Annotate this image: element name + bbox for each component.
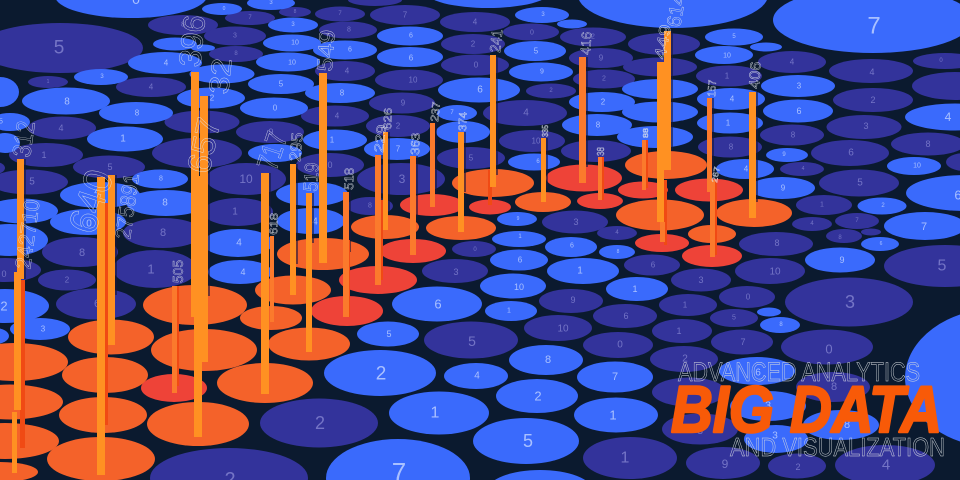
- blue data cells with digits: 5: [279, 80, 284, 88]
- indigo data cells with digits: 9: [599, 54, 604, 62]
- blue data cells with digits: 6: [409, 32, 413, 40]
- indigo data cells with digits: 5: [468, 333, 476, 349]
- blue data cells with digits: 7: [396, 144, 401, 154]
- blue data cells with digits: 6: [518, 256, 523, 264]
- indigo data cells with digits: 2: [396, 122, 401, 130]
- indigo data cells with digits: 5: [107, 162, 113, 172]
- indigo data cells with digits: 8: [838, 235, 842, 241]
- shorter deep orange value bars: [172, 57, 715, 393]
- indigo data cells with digits: 4: [790, 58, 795, 66]
- rotated value labels above bars: 237: [429, 101, 443, 122]
- rotated value labels above bars: 363: [408, 132, 423, 155]
- indigo data cells with digits: 2: [602, 76, 606, 82]
- indigo data cells with digits: 5: [469, 154, 474, 162]
- blue data cells with digits: 6: [348, 46, 352, 54]
- blue data cells with digits: 8: [135, 108, 140, 118]
- blue data cells with digits: 2: [534, 388, 542, 404]
- indigo data cells with digits: 6: [623, 311, 629, 321]
- indigo data cells with digits: 3: [698, 275, 704, 285]
- indigo data cells with digits: 2: [315, 413, 325, 433]
- blue data cells with digits: 3: [41, 324, 46, 334]
- indigo data cells with digits: 4: [58, 123, 64, 133]
- blue data cells with digits: 9: [781, 184, 786, 192]
- rotated value labels above bars: 312: [6, 119, 41, 159]
- indigo data cells with digits: 8: [697, 425, 703, 437]
- rotated value labels above bars: 242710: [10, 198, 45, 271]
- indigo data cells with digits: 4: [882, 456, 890, 474]
- indigo data cells with digits: 0: [473, 247, 477, 253]
- rotated value labels above bars: 38: [596, 147, 607, 156]
- indigo data cells with digits: 2: [471, 40, 476, 48]
- blue data cells with digits: 2: [881, 203, 885, 209]
- rotated value labels above bars: 416: [577, 31, 595, 55]
- rotated value labels above bars: 549: [312, 29, 340, 72]
- blue data cells with digits: 10: [291, 40, 299, 46]
- indigo data cells with digits: 8: [347, 26, 351, 34]
- blue data cells with digits: 1: [507, 308, 511, 314]
- rotated value labels above bars: 157: [706, 79, 719, 97]
- rotated value labels above bars: 406: [746, 61, 765, 89]
- blue data cells with digits: 5: [386, 329, 392, 339]
- indigo data cells with digits: 6: [848, 148, 854, 158]
- indigo data cells with digits: 8: [791, 130, 796, 140]
- indigo data cells with digits: 6: [94, 298, 100, 310]
- blue data cells with digits: 8: [779, 322, 783, 328]
- indigo data cells with digits: 2: [870, 95, 876, 105]
- blue data cells with digits: 6: [477, 84, 483, 96]
- blue data cells with digits: 7: [921, 221, 927, 233]
- indigo data cells with digits: 7: [740, 337, 746, 347]
- indigo data cells with digits: 1: [147, 262, 155, 276]
- indigo data cells with digits: 0: [474, 60, 479, 70]
- indigo data cells with digits: 3: [863, 121, 869, 131]
- rotated value labels above bars: 626: [382, 108, 395, 130]
- indigo data cells with digits: 4: [523, 108, 529, 118]
- rotated value labels above bars: 229: [371, 124, 389, 153]
- indigo data cells with digits: 10: [769, 266, 781, 278]
- blue data cells with digits: 6: [570, 242, 574, 250]
- rotated value labels above bars: 335: [541, 125, 550, 137]
- blue data cells with digits: 2: [210, 94, 215, 102]
- indigo data cells with digits: 7: [199, 117, 205, 127]
- blue data cells with digits: 1: [431, 404, 440, 422]
- blue data cells with digits: 1: [120, 134, 126, 144]
- rotated value labels above bars: 518: [341, 168, 357, 190]
- indigo data cells with digits: 1: [820, 202, 824, 208]
- blue data cells with digits: 3: [772, 430, 778, 442]
- rotated value labels above bars: 275891: [110, 172, 144, 241]
- rotated value labels above bars: 295: [287, 132, 307, 162]
- blue data cells with digits: 6: [434, 296, 442, 312]
- blue data cells with digits: 3: [797, 82, 802, 90]
- indigo data cells with digits: 1: [683, 300, 688, 310]
- blue data cells with digits: 8: [617, 249, 620, 255]
- rotated value labels above bars: 519: [300, 162, 324, 192]
- indigo data cells with digits: 8: [774, 238, 780, 248]
- blue data cells with digits: 3: [541, 12, 545, 18]
- blue data cells with digits: 3: [100, 74, 104, 80]
- indigo data cells with digits: 8: [831, 381, 837, 393]
- blue data cells with digits: 2: [376, 364, 386, 384]
- indigo data cells with digits: 7: [403, 10, 408, 20]
- indigo data cells with digits: 1: [41, 150, 47, 160]
- indigo data cells with digits: 1: [621, 450, 630, 466]
- indigo data cells with digits: 9: [401, 98, 406, 108]
- blue data cells with digits: 10: [514, 282, 524, 292]
- blue data cells with digits: 6: [755, 368, 761, 378]
- indigo data cells with digits: 6: [651, 260, 656, 270]
- blue data cells with digits: 8: [545, 354, 551, 366]
- blue data cells with digits: 8: [340, 88, 345, 98]
- indigo data cells with digits: 3: [845, 292, 855, 312]
- indigo data cells with digits: 3: [233, 32, 237, 40]
- blue data cells with digits: 10: [913, 162, 921, 170]
- indigo data cells with digits: 7: [194, 147, 200, 159]
- blue data cells with digits: 10: [288, 60, 296, 66]
- indigo data cells with digits: 3: [573, 217, 579, 227]
- blue data cells with digits: 4: [240, 267, 246, 277]
- rotated value labels above bars: 657: [180, 114, 227, 176]
- rotated value labels above bars: 449: [652, 23, 675, 61]
- orange data cells: [0, 151, 792, 480]
- indigo data cells with digits: 7: [338, 11, 342, 17]
- indigo data cells with digits: 8: [729, 142, 734, 152]
- red bar side stripes: [20, 140, 717, 448]
- indigo data cells with digits: 10: [532, 136, 541, 146]
- indigo data cells with digits: 0: [327, 160, 333, 170]
- indigo data cells with digits: 9: [268, 127, 274, 137]
- indigo data cells with digits: 2: [549, 88, 553, 94]
- indigo data cells with digits: 8: [294, 9, 297, 15]
- indigo data cells with digits: 0: [617, 340, 623, 350]
- blue data cells with digits: 3: [765, 400, 771, 412]
- blue data cells with digits: 3: [291, 22, 295, 28]
- indigo data cells with digits: 0: [1, 269, 7, 279]
- blue data cells with digits: 1: [518, 234, 522, 240]
- blue data cells with digits: 0: [86, 218, 92, 230]
- indigo data cells with digits: 2: [591, 34, 595, 40]
- indigo data cells with digits: 1: [676, 326, 682, 336]
- indigo data cells with digits: 0: [530, 30, 534, 36]
- indigo data cells with digits: 4: [869, 67, 875, 77]
- blue data cells with digits: 5: [534, 46, 539, 56]
- blue data cells with digits: 0: [273, 104, 278, 112]
- indigo data cells with digits: 10: [409, 76, 418, 84]
- blue data cells with digits: 9: [517, 216, 520, 222]
- blue data cells with digits: 4: [945, 110, 952, 124]
- blue data cells with digits: 1: [632, 284, 638, 294]
- indigo data cells with digits: 1: [725, 72, 730, 80]
- indigo data cells with digits: 4: [335, 112, 340, 120]
- rotated value labels above bars: 267: [710, 165, 722, 183]
- blue data cells with digits: 4: [94, 186, 100, 198]
- indigo data cells with digits: 2: [682, 354, 688, 364]
- bar shadows: [24, 31, 758, 296]
- blue data cells with digits: 7: [450, 110, 454, 116]
- blue data cells with digits: 5: [523, 431, 533, 451]
- blue data cells with digits: 8: [596, 120, 601, 130]
- blue data cells with digits: 1: [609, 408, 617, 422]
- indigo data cells with digits: 8: [79, 247, 85, 259]
- blue data cells with digits: 9: [839, 255, 845, 265]
- blue data cells with digits: 1: [577, 266, 583, 276]
- indigo data cells with digits: 2: [65, 276, 70, 284]
- indigo data cells with digits: 8: [181, 22, 185, 28]
- indigo data cells with digits: 10: [557, 324, 569, 334]
- rotated value labels above bars: 374: [457, 112, 470, 131]
- rotated value labels above bars: [6, 0, 765, 283]
- blue data cells with digits: 8: [844, 419, 850, 431]
- rotated value labels above bars: 505: [170, 260, 187, 283]
- indigo data cells with digits: 0: [939, 58, 943, 64]
- rotated value labels above bars: 32: [203, 57, 238, 96]
- blue data cells with digits: 10: [723, 52, 731, 60]
- blue data cells with digits: 4: [730, 94, 735, 104]
- blue data cells with digits: 7: [612, 371, 618, 383]
- blue data cells with digits: 0: [223, 6, 226, 12]
- blue data cells with digits: 4: [164, 58, 169, 68]
- blue data cells with digits: 1: [726, 118, 731, 128]
- indigo data cells with digits: 8: [234, 51, 238, 57]
- indigo data cells with digits: 4: [149, 82, 154, 92]
- indigo data cells with digits: 4: [473, 18, 478, 26]
- indigo data cells with digits: 5: [857, 178, 863, 188]
- blue data cells with digits: 6: [796, 106, 802, 116]
- indigo data cells with digits: 0: [746, 292, 751, 302]
- blue data cells with digits: 7: [867, 12, 881, 40]
- indigo data cells with digits: 4: [615, 230, 619, 236]
- blue data cells with digits: 6: [536, 159, 540, 165]
- indigo data cells with digits: 4: [810, 221, 814, 227]
- blue data cells with digits: 3: [269, 0, 273, 6]
- indigo data cells with digits: 3: [399, 172, 406, 186]
- blue data cells with digits: 4: [744, 164, 749, 174]
- indigo data cells with digits: 5: [29, 176, 35, 188]
- blue data cells with digits: 9: [540, 68, 544, 76]
- indigo data cells with digits: 8: [368, 202, 372, 210]
- indigo data cells with digits: 9: [722, 457, 729, 471]
- indigo data cells with digits: 3: [453, 267, 459, 277]
- indigo data cells with digits: 3: [662, 40, 667, 48]
- indigo data cells with digits: 5: [732, 314, 736, 322]
- indigo data cells with digits: 0: [825, 342, 833, 356]
- indigo data cells with digits: 1: [232, 206, 238, 218]
- blue data cells with digits: 6: [409, 54, 414, 62]
- rotated value labels above bars: 396: [172, 13, 212, 69]
- rotated value labels above bars: 88: [643, 128, 650, 138]
- indigo data cells with digits: 8: [925, 139, 931, 149]
- blue data cells with digits: 4: [474, 370, 480, 382]
- blue data cells with digits: 1: [330, 136, 335, 144]
- indigo data cells with digits: 4: [802, 166, 805, 172]
- rotated value labels above bars: 618: [268, 213, 281, 235]
- blue data cells with digits: 4: [312, 216, 318, 228]
- indigo data cells with digits: 1: [47, 79, 50, 85]
- tall bright value bars: [12, 31, 756, 475]
- indigo data cells with digits: 5: [54, 38, 64, 58]
- indigo data cells with digits: 5: [938, 258, 947, 274]
- indigo data cells with digits: 4: [345, 66, 350, 76]
- blue data cells with digits: 4: [236, 238, 242, 248]
- blue data cells with digits: 2: [0, 298, 8, 314]
- blue data cells with digits: 6: [880, 241, 883, 247]
- indigo data cells with digits: 2: [795, 462, 801, 472]
- blue data cells with digits: 8: [64, 96, 70, 108]
- rotated value labels above bars: 241: [487, 29, 506, 53]
- rotated value labels above bars: 640: [61, 164, 122, 239]
- indigo data cells with digits: 7: [855, 218, 859, 224]
- indigo data cells with digits: 8: [160, 227, 166, 239]
- blue data cells with digits: 2: [601, 98, 606, 106]
- indigo data cells with digits: 9: [570, 295, 576, 305]
- blue data cells with digits: 8: [162, 198, 168, 208]
- red data cells: [141, 164, 743, 402]
- rotated value labels above bars: 717: [251, 128, 294, 174]
- blue data cells with digits: 8: [159, 176, 163, 182]
- indigo data cells with digits: 10: [239, 172, 253, 186]
- blue data cells with digits: 9: [782, 152, 786, 158]
- blue data cells with digits: 5: [732, 34, 736, 40]
- indigo data cells with digits: 7: [248, 15, 252, 21]
